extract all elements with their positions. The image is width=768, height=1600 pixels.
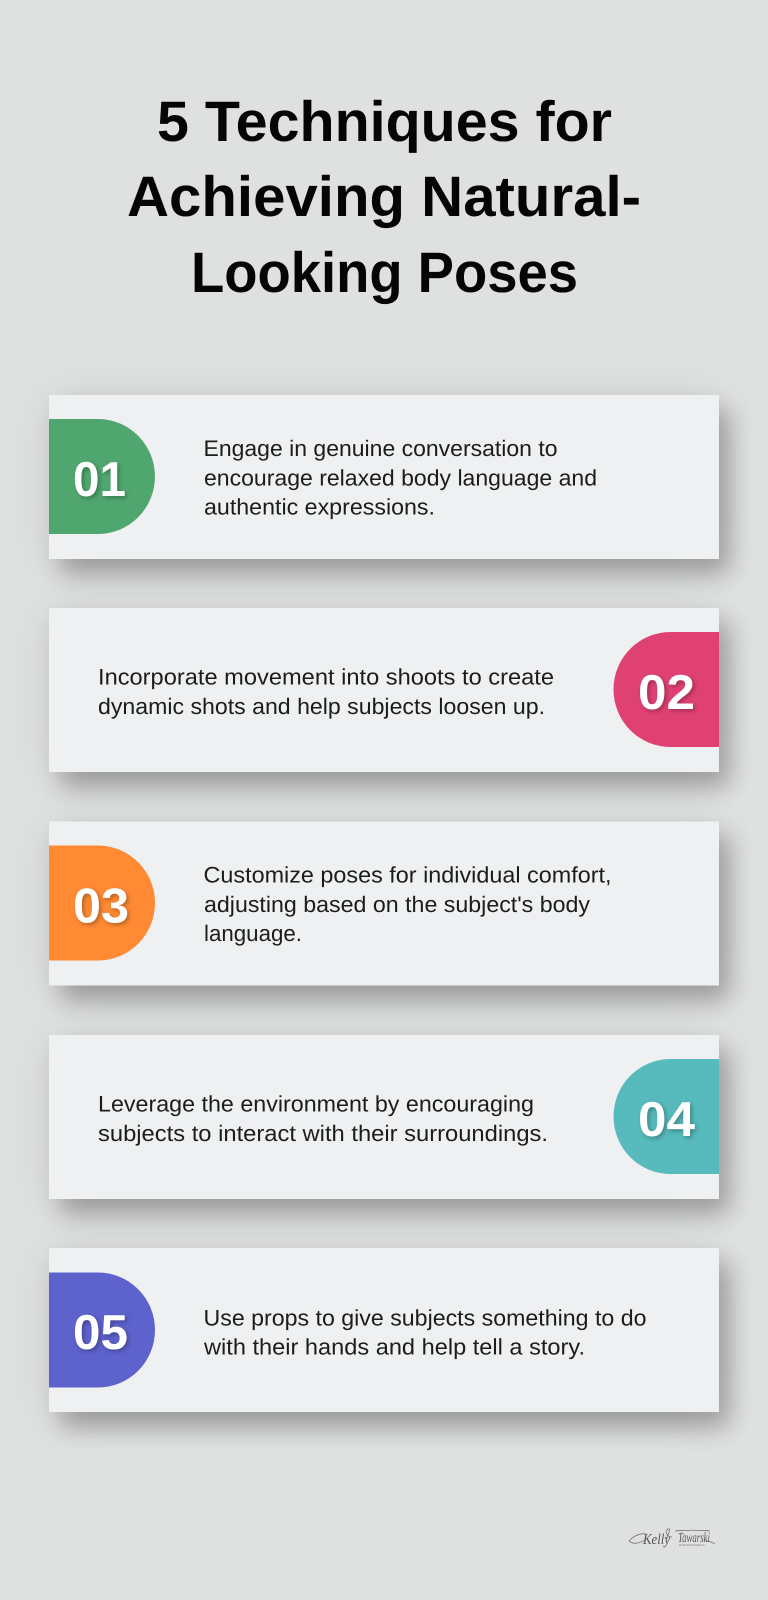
logo: signature: Tawarski	[678, 1531, 710, 1546]
text: step 01: encourage relaxed body language and	[204, 465, 597, 490]
panel: step 03	[49, 822, 729, 1000]
text: step 01: Engage in genuine conversation to	[204, 436, 558, 461]
text: step 02: dynamic shots and help subjects loosen up.	[98, 694, 545, 719]
text: step 05: with their hands and help tell a story.	[203, 1335, 585, 1360]
text: step 05: Use props to give subjects something to do	[204, 1305, 646, 1330]
badge: 01	[49, 419, 155, 534]
text: step 02: Incorporate movement into shoots to create	[98, 665, 554, 690]
text: step 04	[98, 1092, 548, 1146]
panel: step 01	[49, 395, 729, 574]
logo: signature: PHOTOGRAPHY	[679, 1544, 705, 1547]
badge: 04	[614, 1059, 719, 1174]
title: Looking Poses	[191, 241, 578, 305]
title	[127, 90, 641, 305]
text: step 03: Customize poses for individual comfort,	[204, 863, 612, 888]
badge: 04: 04	[638, 1093, 695, 1147]
text: step 03: language.	[204, 921, 302, 946]
logo: signature	[629, 1529, 715, 1548]
panel: step 04	[49, 1035, 729, 1214]
badge: 05	[49, 1272, 155, 1388]
badge: 03	[49, 846, 155, 960]
text: step 04: subjects to interact with their surroundings.	[98, 1121, 548, 1146]
title: 5 Techniques for	[157, 90, 612, 154]
title: Achieving Natural-	[127, 165, 641, 229]
logo: signature: Kelly	[642, 1532, 670, 1548]
text: step 03: adjusting based on the subject's body	[204, 892, 591, 917]
text: step 01: authentic expressions.	[204, 495, 435, 520]
text: step 03	[204, 863, 612, 946]
badge: 02: 02	[638, 666, 695, 720]
badge: 05: 05	[73, 1306, 128, 1360]
panel: step 05	[49, 1248, 729, 1427]
badge: 02	[614, 632, 719, 747]
badge: 01: 01	[73, 453, 126, 507]
text: step 01	[204, 436, 597, 520]
badge: 03: 03	[73, 880, 129, 934]
text: step 04: Leverage the environment by encouraging	[98, 1092, 534, 1117]
panel: step 02	[49, 608, 729, 787]
text: step 02	[98, 665, 554, 719]
text: step 05	[203, 1305, 646, 1360]
